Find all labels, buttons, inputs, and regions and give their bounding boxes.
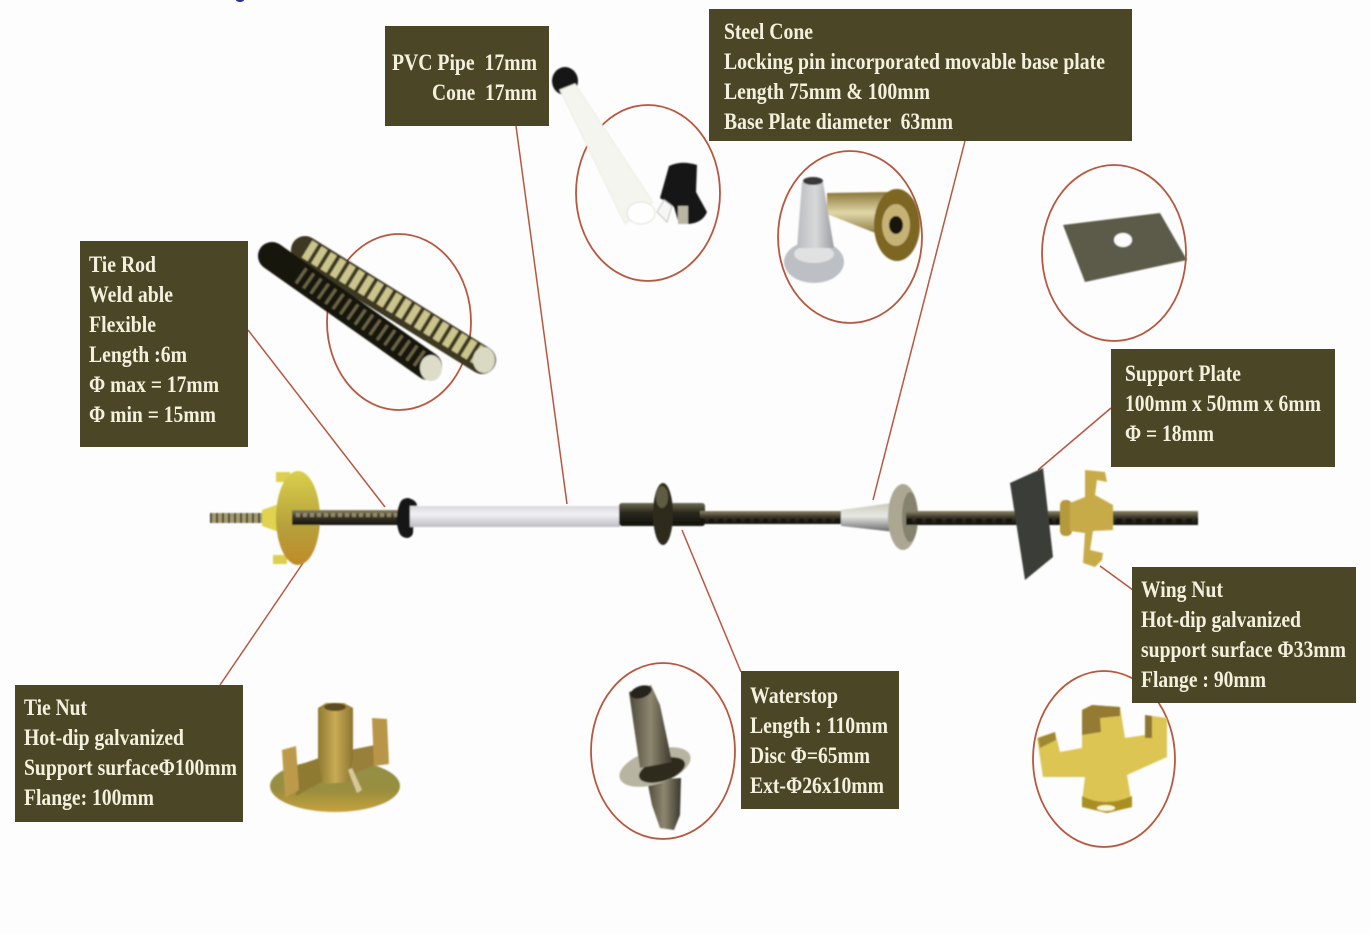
product photo: waterstop	[615, 683, 695, 830]
steel cone on rod	[841, 484, 918, 550]
label: Tie Rod: Weld able	[89, 282, 173, 307]
label: Waterstop	[741, 671, 899, 809]
cone silver bolt	[678, 206, 688, 224]
threaded rod, right section	[906, 511, 1198, 525]
assembled tie rod system	[210, 468, 1198, 580]
collar shade	[1082, 796, 1132, 813]
waterstop upper shaft	[629, 685, 672, 768]
label: PVC Pipe	[385, 26, 549, 126]
flange disc	[270, 760, 400, 812]
gold cone body	[827, 192, 888, 238]
waterstop opening	[629, 683, 653, 701]
plate hole	[1114, 233, 1132, 247]
silver cone opening	[803, 177, 823, 185]
right post	[372, 718, 389, 766]
white pipe	[560, 84, 653, 224]
PVC pipe	[410, 506, 620, 527]
label: PVC Pipe: PVC Pipe 17mm	[392, 50, 537, 75]
label: Tie Rod: Φ max = 17mm	[89, 372, 219, 397]
left rod end thread	[210, 513, 266, 523]
label: Waterstop: Disc Φ=65mm	[750, 743, 870, 768]
left post	[282, 746, 299, 798]
label: Wing Nut: Hot-dip galvanized	[1141, 607, 1301, 632]
support plate on rod	[1010, 468, 1053, 580]
top edge ink speck	[236, 0, 244, 2]
label: Steel Cone: Locking pin incorporated movable base plate	[724, 49, 1105, 74]
product photo: wing nut	[1037, 705, 1167, 813]
label: Waterstop: Waterstop	[750, 683, 838, 708]
leader lines	[220, 126, 1133, 685]
wing nut on rod	[1060, 470, 1113, 567]
right prong shade	[1145, 715, 1152, 738]
label: Wing Nut	[1132, 567, 1356, 703]
label: Tie Nut: Tie Nut	[24, 695, 87, 720]
rubber gasket	[397, 498, 417, 538]
label: Tie Nut: Support surfaceΦ100mm	[24, 755, 237, 780]
label: Tie Rod: Φ min = 15mm	[89, 402, 216, 427]
post shade	[1082, 705, 1120, 735]
tie nut on rod	[262, 471, 320, 565]
label: Tie Rod: Tie Rod	[89, 252, 156, 277]
cross body with neck and collar	[1037, 705, 1167, 813]
gold rod	[305, 249, 495, 373]
threaded rod, middle section	[700, 511, 842, 524]
waterstop on rod	[619, 483, 705, 545]
label: Steel Cone	[709, 9, 1132, 141]
detail circle: support plate	[1042, 165, 1186, 341]
label: PVC Pipe: Cone 17mm	[432, 80, 537, 105]
label: Steel Cone: Steel Cone	[724, 19, 813, 44]
label: Tie Nut	[15, 685, 243, 822]
product photo: tie rods	[272, 249, 495, 381]
label: Steel Cone: Length 75mm & 100mm	[724, 79, 930, 104]
label: Wing Nut: Flange : 90mm	[1141, 667, 1266, 692]
gold cone disc	[874, 189, 920, 261]
silver cone base	[784, 241, 844, 283]
label: Wing Nut: Wing Nut	[1141, 577, 1223, 602]
product photo: tie nut	[270, 703, 400, 812]
hex column	[318, 703, 353, 784]
label: Tie Rod: Length :6m	[89, 342, 187, 367]
label: Support Plate: 100mm x 50mm x 6mm	[1125, 391, 1321, 416]
front fin	[348, 768, 362, 793]
detail circle: waterstop	[591, 663, 735, 839]
hex opening	[324, 703, 346, 711]
waterstop disc	[615, 739, 695, 795]
label: Support Plate: Φ = 18mm	[1125, 421, 1214, 446]
left arm	[296, 757, 322, 796]
detail circle: PVC pipe and cone	[576, 105, 720, 281]
label: Waterstop: Ext-Φ26x10mm	[750, 773, 884, 798]
label: Tie Nut: Hot-dip galvanized	[24, 725, 184, 750]
product photo: steel cones	[784, 177, 920, 283]
detail circle: tie rod	[327, 234, 471, 410]
dark rod	[272, 256, 442, 381]
waterstop lower shaft	[647, 778, 681, 830]
label: Steel Cone: Base Plate diameter 63mm	[724, 109, 953, 134]
left prong shade	[1038, 732, 1056, 748]
pipe mouth	[627, 202, 655, 224]
label: Waterstop: Length : 110mm	[750, 713, 888, 738]
product photo: PVC pipe and cone	[552, 67, 707, 224]
right arm	[350, 745, 375, 775]
label: Support Plate	[1111, 349, 1335, 467]
label: Tie Nut: Flange: 100mm	[24, 785, 154, 810]
label: Tie Rod: Flexible	[89, 312, 156, 337]
detail circle: steel cone	[778, 151, 922, 323]
label: Support Plate: Support Plate	[1125, 361, 1241, 386]
pipe end cap	[552, 67, 578, 95]
label: Tie Rod	[80, 241, 248, 447]
black plastic cone	[660, 163, 707, 224]
cone clear side	[657, 200, 672, 222]
threaded rod, left section	[292, 510, 400, 525]
detail circle: wing nut	[1033, 671, 1175, 847]
product photo: support plate	[1063, 213, 1187, 282]
silver cone body	[797, 182, 834, 248]
collar highlight	[1097, 805, 1115, 811]
